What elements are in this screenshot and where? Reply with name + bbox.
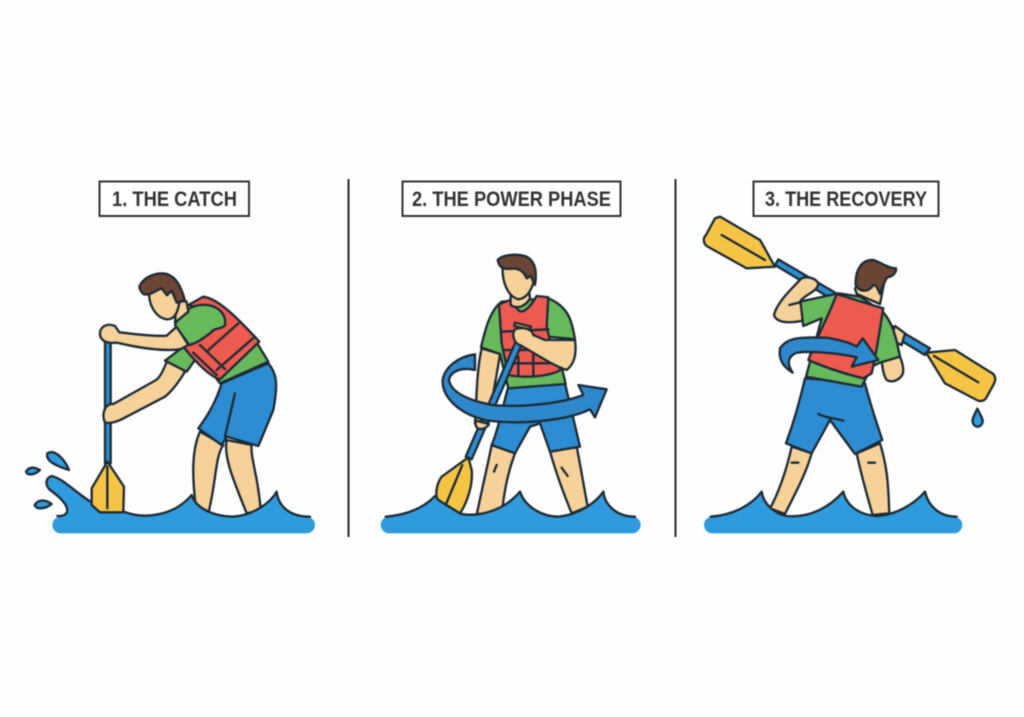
shorts — [492, 383, 580, 453]
right hand — [890, 326, 905, 345]
legs — [770, 443, 889, 515]
right arm and hand — [513, 328, 576, 370]
illustration: paddler pulling with torso rotation — [381, 255, 641, 533]
panel 2: the power phase — [381, 182, 641, 533]
heading: 2. The Power Phase — [402, 182, 620, 216]
life vest — [183, 297, 259, 379]
lower arm and sleeve — [103, 347, 195, 423]
left arm — [774, 277, 818, 322]
panel 1: the catch — [26, 182, 315, 533]
water — [381, 492, 641, 533]
paddle — [92, 342, 124, 512]
arm crease — [789, 302, 800, 305]
water drop — [973, 409, 983, 427]
legs — [193, 432, 261, 513]
paddle — [704, 217, 995, 401]
heading: 3. The Recovery: 3. THE RECOVERY — [765, 188, 927, 211]
water — [704, 492, 962, 533]
shorts — [786, 378, 882, 454]
legs — [477, 445, 588, 515]
rotation arrow — [780, 337, 878, 373]
heading: 2. The Power Phase: 2. THE POWER PHASE — [412, 188, 611, 211]
lower hand — [475, 421, 489, 429]
sleeve — [175, 305, 225, 345]
upper arm — [100, 325, 188, 350]
illustration: paddler recovering paddle — [704, 217, 995, 533]
neck and head — [139, 273, 188, 323]
paddle — [436, 323, 531, 513]
divider 1 — [348, 179, 350, 537]
right arm — [882, 357, 903, 381]
illustration: paddler catching water — [26, 273, 315, 533]
divider 2 — [674, 179, 676, 537]
life vest — [499, 296, 561, 377]
left arm — [475, 348, 500, 428]
shirt — [481, 298, 575, 388]
heading: 3. The Recovery — [754, 182, 938, 216]
water with splash — [26, 452, 315, 533]
heading: 1. The Catch — [100, 182, 249, 216]
shorts — [198, 363, 276, 446]
torso shirt — [200, 337, 268, 383]
panel 3: the recovery — [704, 182, 995, 533]
shirt — [800, 293, 900, 387]
neck and head — [498, 255, 536, 307]
heading: 1. The Catch: 1. THE CATCH — [112, 188, 237, 211]
life vest — [808, 294, 883, 378]
head from behind — [855, 260, 896, 304]
rotation arrow — [443, 354, 607, 422]
